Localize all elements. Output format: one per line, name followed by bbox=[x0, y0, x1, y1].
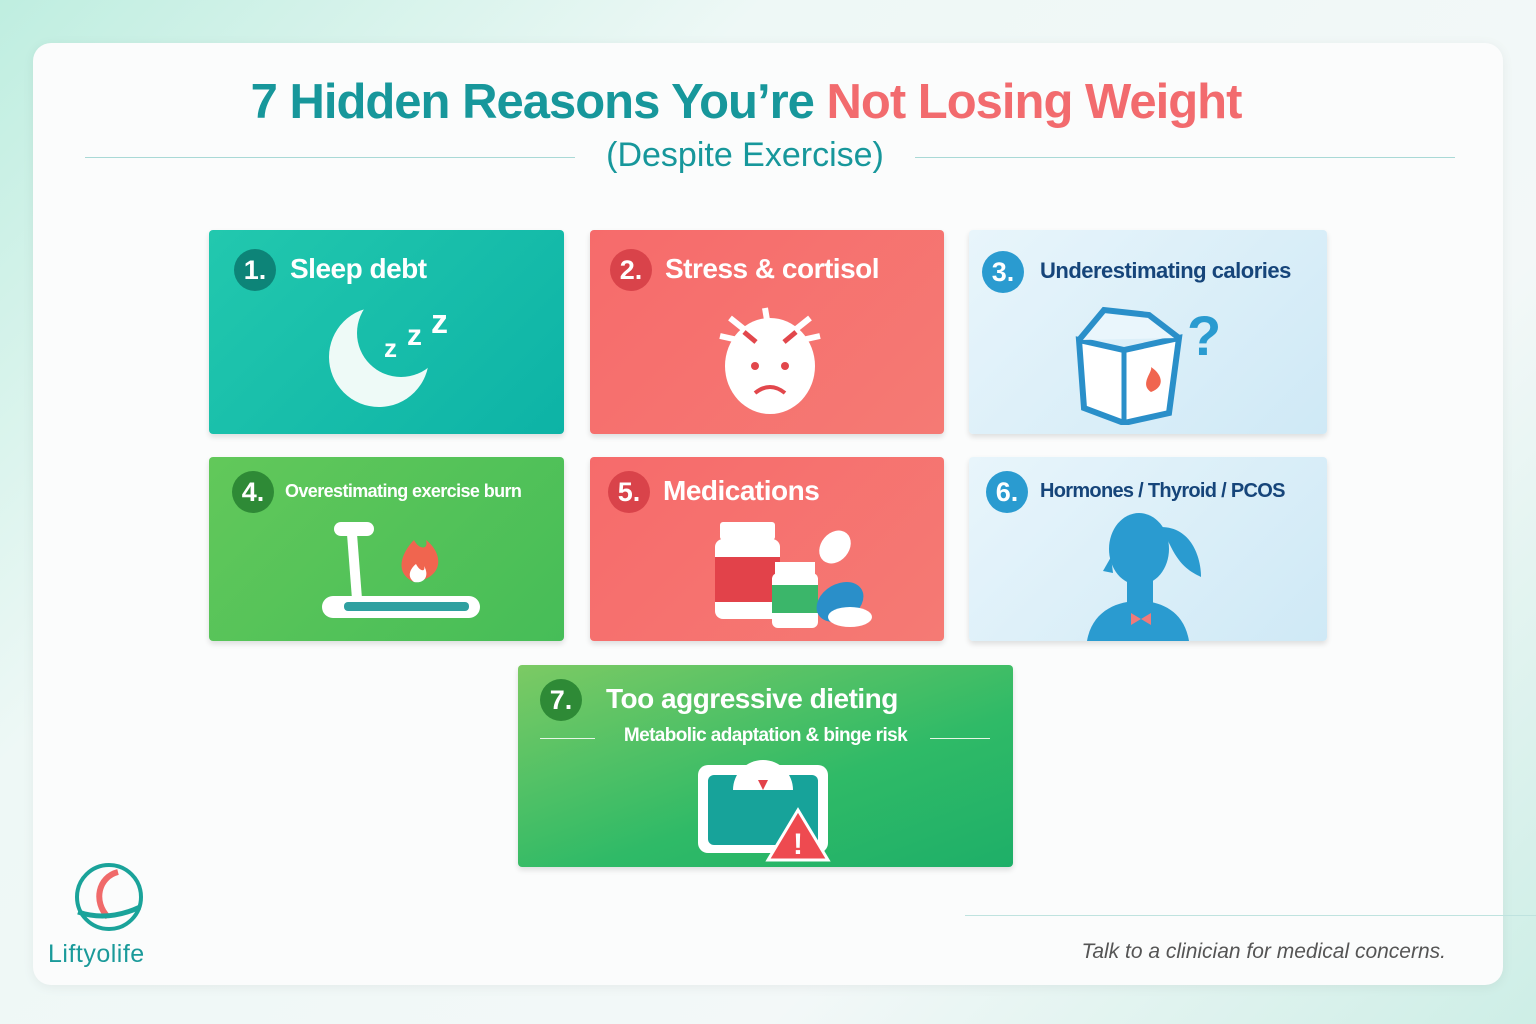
sublabel: Metabolic adaptation & binge risk bbox=[624, 725, 907, 746]
subtitle: (Despite Exercise) bbox=[606, 136, 884, 174]
label: Hormones / Thyroid / PCOS bbox=[1040, 480, 1285, 502]
number 4: 4. bbox=[242, 476, 264, 506]
icon: moon zzz: z bbox=[384, 333, 397, 363]
number 7 bbox=[540, 679, 582, 721]
number 6 bbox=[986, 471, 1028, 513]
label: Sleep debt bbox=[290, 253, 427, 284]
number 2 bbox=[610, 249, 652, 291]
footer line bbox=[965, 915, 1536, 916]
logo bbox=[48, 863, 145, 968]
label: Medications bbox=[663, 475, 819, 506]
number 1: 1. bbox=[244, 254, 266, 284]
logo: Liftyolife bbox=[48, 940, 145, 968]
icon: scale with warning bbox=[698, 760, 831, 862]
panel 3: underestimating calories bbox=[969, 230, 1327, 434]
icon: woman silhouette bbox=[1087, 513, 1201, 641]
icon: treadmill fire bbox=[322, 522, 480, 618]
number 4 bbox=[232, 471, 274, 513]
panel 1: sleep debt bbox=[209, 230, 564, 434]
number 3: 3. bbox=[992, 256, 1014, 286]
panel 5: medications bbox=[590, 457, 944, 641]
icon: takeout box: ? bbox=[1187, 304, 1221, 367]
icon: moon zzz: z bbox=[431, 303, 448, 341]
title: 7 Hidden Reasons You’re Not Losing Weight bbox=[251, 75, 1241, 129]
footer note: Talk to a clinician for medical concerns. bbox=[1081, 940, 1446, 963]
number 6: 6. bbox=[996, 476, 1018, 506]
label: Underestimating calories bbox=[1040, 258, 1291, 283]
label: Stress & cortisol bbox=[665, 253, 879, 284]
label: Overestimating exercise burn bbox=[285, 481, 521, 501]
icon: stressed face bbox=[719, 308, 821, 414]
number 3 bbox=[982, 251, 1024, 293]
label: Too aggressive dieting bbox=[606, 683, 898, 714]
panel 7: aggressive dieting bbox=[518, 665, 1013, 867]
icon: moon zzz: z bbox=[407, 319, 422, 352]
panel 4: overestimating exercise burn bbox=[209, 457, 564, 641]
number 5: 5. bbox=[618, 476, 640, 506]
icon: pill bottles bbox=[715, 522, 872, 628]
icon: takeout box bbox=[1076, 304, 1221, 425]
number 1 bbox=[234, 249, 276, 291]
panel 2: stress bbox=[590, 230, 944, 434]
panel 6: hormones bbox=[969, 457, 1327, 641]
number 7: 7. bbox=[550, 684, 572, 714]
icon: scale with warning: ! bbox=[793, 828, 803, 861]
icon: moon zzz bbox=[329, 303, 448, 407]
number 2: 2. bbox=[620, 254, 642, 284]
number 5 bbox=[608, 471, 650, 513]
